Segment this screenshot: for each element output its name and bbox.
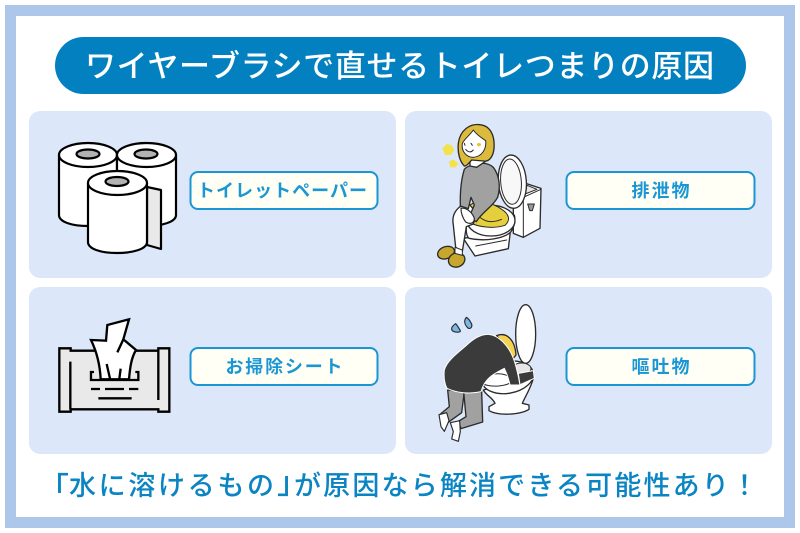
- illustration: woman sitting on toilet: [436, 124, 541, 269]
- bottom message: が原因なら解消できる可能性あり！: [294, 471, 758, 501]
- bottom message: [38, 466, 758, 506]
- label: vomit: [566, 348, 754, 385]
- title banner: ワイヤーブラシで直せるトイレつまりの原因: [85, 49, 714, 84]
- panel: cleaning sheet: [29, 287, 396, 454]
- icon: wet wipes package: [59, 319, 169, 412]
- bottom message: 」: [277, 466, 308, 500]
- label: excrement: [566, 172, 754, 209]
- panel: vomit: [405, 287, 772, 454]
- label: vomit: 嘔吐物: [632, 357, 690, 377]
- bottom message: 「: [38, 472, 69, 506]
- bottom message: 水に溶けるもの: [69, 471, 274, 501]
- panel: toilet paper: [29, 111, 396, 278]
- icon: toilet paper rolls: [59, 143, 176, 253]
- illustration: person vomiting into toilet: [439, 305, 536, 441]
- label: cleaning sheet: [190, 348, 378, 385]
- label: toilet paper: トイレットペーパー: [197, 181, 367, 201]
- label: toilet paper: [190, 172, 378, 209]
- title banner: [55, 37, 746, 94]
- label: cleaning sheet: お掃除シート: [226, 357, 342, 377]
- panel: excrement: [405, 111, 772, 278]
- label: excrement: 排泄物: [632, 181, 690, 201]
